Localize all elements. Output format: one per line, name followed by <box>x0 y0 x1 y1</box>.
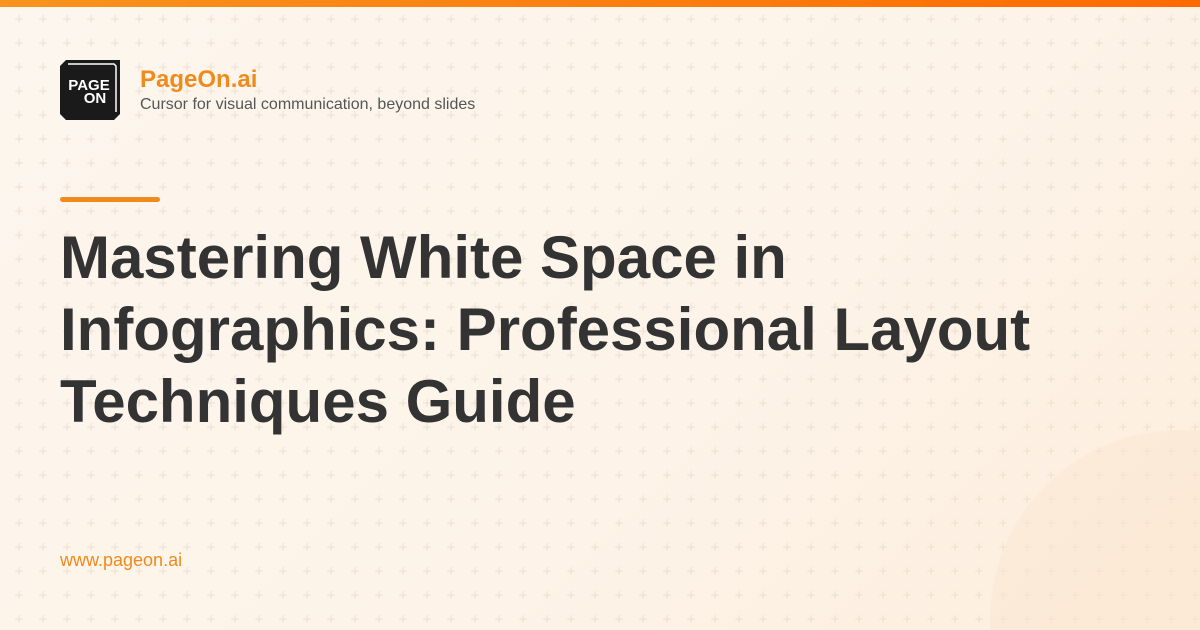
tagline: Cursor for visual communication, beyond slides <box>140 96 475 113</box>
logo <box>60 60 120 120</box>
logo: PAGE <box>68 77 110 94</box>
url: www.pageon.ai <box>60 550 182 570</box>
brand name: PageOn.ai <box>140 66 257 93</box>
accent line <box>60 197 160 202</box>
title: Mastering White Space in Infographics: Professional Layout Techniques Guide <box>60 224 1030 435</box>
top bar <box>0 0 1200 7</box>
logo: ON <box>84 90 106 107</box>
